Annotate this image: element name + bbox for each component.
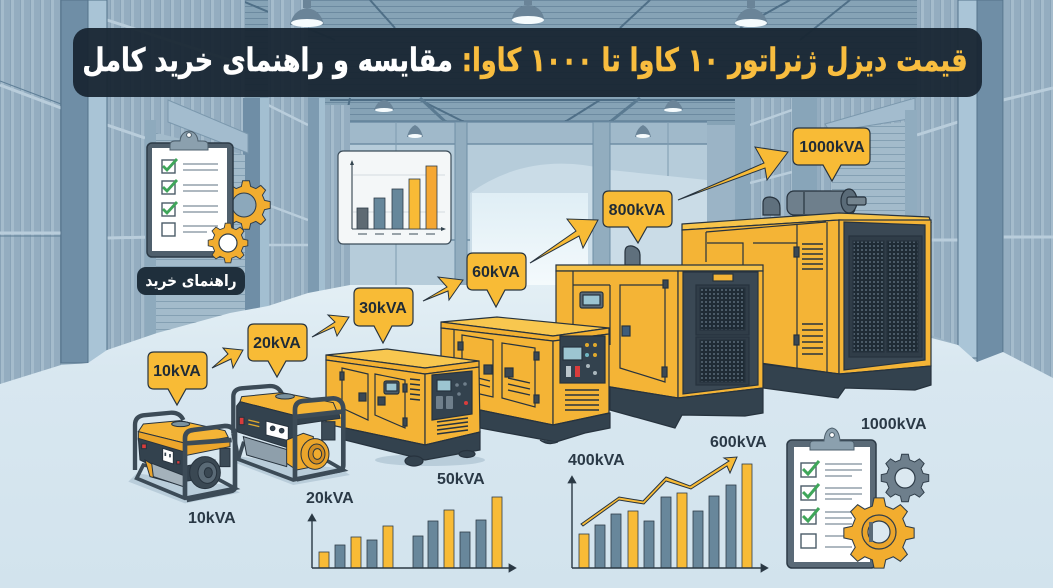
- muffler and exhaust: [763, 189, 866, 215]
- title: [73, 28, 982, 97]
- skid base: [345, 428, 480, 460]
- callout: 1000kVA: [793, 128, 870, 181]
- icon: large yellow gear: [844, 498, 914, 568]
- generator: 400kVA: [441, 317, 610, 444]
- capacity labels: 400kVA: [568, 452, 625, 469]
- ceiling lamps: [290, 0, 768, 138]
- generator: 20kVA portable: [233, 386, 350, 485]
- label: buying guide: [137, 267, 245, 295]
- capacity labels: 1000kVA: [861, 416, 927, 433]
- growth arrows: [212, 147, 788, 368]
- bar chart: bottom left: [308, 497, 516, 572]
- icon: checklist clipboard bottom: [787, 428, 929, 568]
- callout: 10kVA: 10kVA: [153, 363, 201, 380]
- callout: 1000kVA: 1000kVA: [799, 139, 865, 156]
- callout: 30kVA: 30kVA: [359, 300, 407, 317]
- skid base: [610, 387, 763, 428]
- callout: 10kVA: [148, 352, 207, 405]
- icon: large orange gear: [222, 181, 270, 229]
- ceiling: [0, 0, 1053, 130]
- right walls: [735, 0, 1053, 378]
- callout: 800kVA: [603, 191, 672, 243]
- generator: 1000kVA: [682, 189, 931, 398]
- capacity labels: 10kVA: [188, 510, 236, 527]
- generator: 50kVA: [326, 349, 485, 466]
- back door: [472, 193, 588, 293]
- back wall: [350, 122, 707, 293]
- capacity labels: 20kVA: [306, 490, 354, 507]
- icon: checklist clipboard top: [147, 131, 270, 263]
- callout: 800kVA: 800kVA: [609, 202, 666, 219]
- bar chart: bottom right with trend arrow: [568, 457, 768, 572]
- capacity labels: [188, 416, 927, 527]
- icon: small orange gear: [208, 223, 248, 263]
- callout: 60kVA: [467, 253, 526, 307]
- callout: 30kVA: [354, 288, 413, 343]
- callout: 20kVA: [248, 324, 307, 377]
- label: buying guide: راهنمای خرید: [145, 271, 237, 290]
- left walls: [0, 0, 350, 385]
- generator: 10kVA portable: [128, 413, 240, 503]
- skid base: [763, 364, 931, 398]
- callout: 60kVA: 60kVA: [472, 264, 520, 281]
- icon: grey gear: [881, 454, 929, 502]
- trend arrow: [581, 457, 737, 526]
- skid base: [480, 410, 610, 442]
- right roller door: [832, 122, 905, 330]
- capacity labels: 50kVA: [437, 471, 485, 488]
- generator: 800kVA: [556, 246, 763, 428]
- title: قیمت دیزل ژنراتور ۱۰ کاوا تا ۱۰۰۰ کاوا: مقایسه و راهنمای خرید کامل: [83, 41, 968, 79]
- callout: 20kVA: 20kVA: [253, 335, 301, 352]
- panel: top bar chart: [338, 151, 451, 244]
- capacity labels: 600kVA: [710, 434, 767, 451]
- floor: [0, 285, 1053, 588]
- left roller door: [145, 130, 245, 338]
